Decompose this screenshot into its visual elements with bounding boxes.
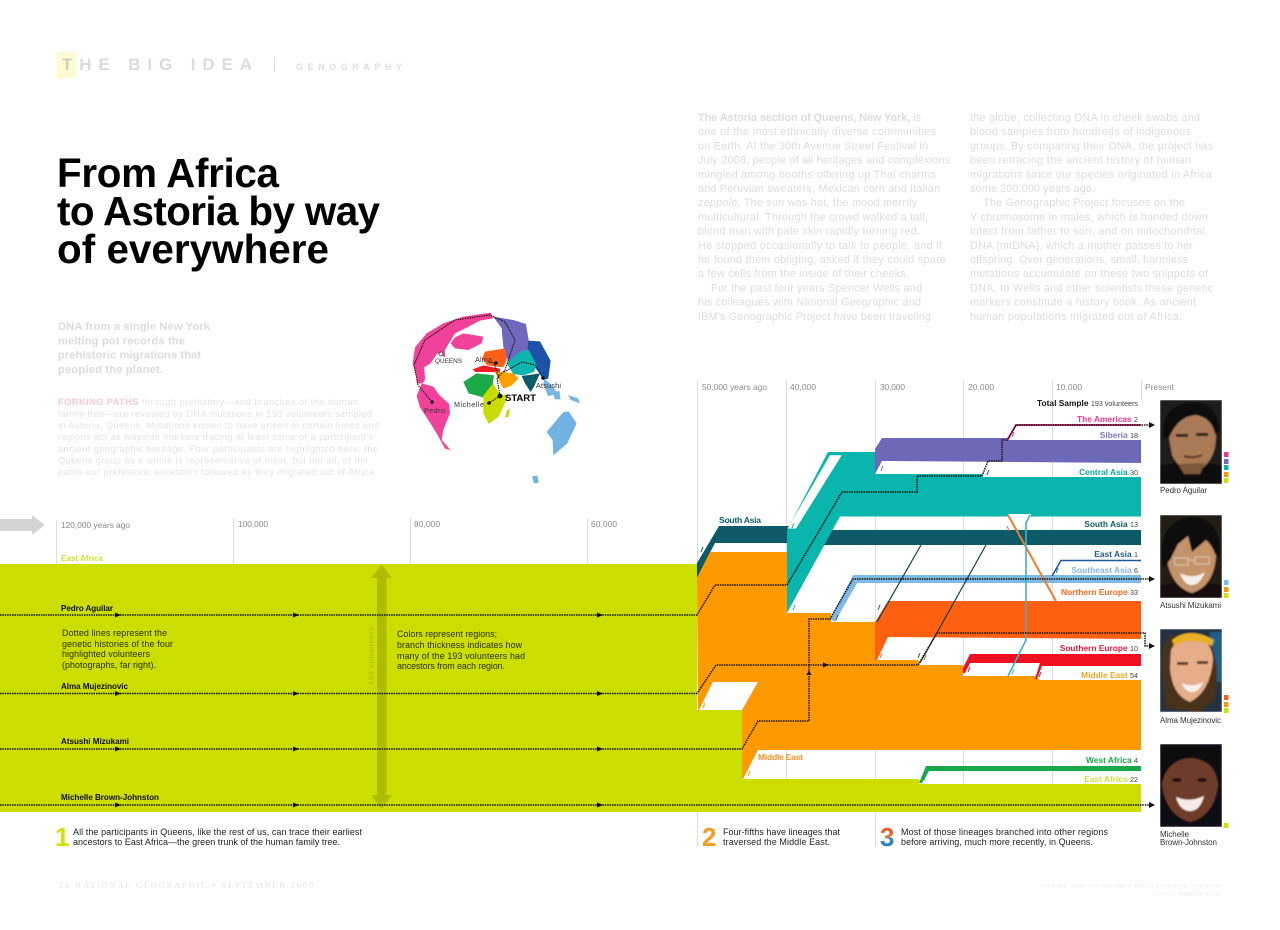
volunteer names on trunk: Alma Mujezinovic bbox=[61, 682, 128, 691]
region swatch: Michelle bbox=[1224, 823, 1228, 828]
timeline labels late: 50,000 years ago bbox=[702, 382, 767, 392]
region labels: Siberia 18 bbox=[1100, 430, 1138, 440]
notch in Central Asia bbox=[1008, 514, 1031, 518]
section header: GENOGRAPHY bbox=[296, 62, 402, 72]
credits bbox=[1040, 884, 1222, 898]
article column 2: DNA (mtDNA), which a mother passes to her bbox=[970, 240, 1193, 252]
dotted route: Michelle bbox=[0, 802, 1155, 808]
region labels: West Africa 4 bbox=[1086, 755, 1138, 765]
forking paths text: in Astoria, Queens. Mutations known to have arisen in certain times and bbox=[58, 420, 379, 430]
timeline labels late: 20,000 bbox=[968, 382, 994, 392]
photo: Alma Mujezinovic bbox=[1160, 629, 1222, 712]
thin connector lines bbox=[877, 545, 986, 663]
label: East Africa trunk: East Africa bbox=[61, 554, 103, 563]
article column 2: Y chromosome in males, which is handed down bbox=[970, 211, 1208, 223]
step 2: 2 bbox=[702, 822, 716, 852]
label: South Asia branch: South Asia bbox=[719, 515, 761, 525]
step 1: All the participants in Queens, like the rest of us, can trace their earliest bbox=[73, 827, 362, 837]
photo: Michelle Brown-Johnston bbox=[1160, 744, 1222, 827]
step 3: before arriving, much more recently, in Queens. bbox=[901, 837, 1093, 847]
article column 2: the globe, collecting DNA in cheek swabs and bbox=[970, 112, 1200, 124]
volunteer names on trunk: Michelle Brown-Johnston bbox=[61, 793, 159, 802]
photo captions: Alma Mujezinovic bbox=[1160, 716, 1221, 725]
article column 1: zeppole. The sun was hot, the mood merrily bbox=[697, 197, 918, 209]
deck text: melting pot records the bbox=[58, 336, 185, 348]
article column 1: The Astoria section of Queens, New York, is bbox=[698, 112, 922, 124]
article column 2: offspring. Over generations, small, harmless bbox=[970, 254, 1189, 266]
region labels: Southeast Asia 6 bbox=[1071, 565, 1138, 575]
gap in Central Asia branch bbox=[788, 455, 842, 528]
region labels: South Asia 13 bbox=[1084, 519, 1138, 529]
article column 2: been retracing the ancient history of human bbox=[970, 155, 1191, 167]
timeline labels early bbox=[61, 519, 617, 530]
arrow: 193 volunteers bbox=[366, 564, 392, 809]
deck text bbox=[58, 321, 211, 376]
timeline labels early: 100,000 bbox=[238, 519, 268, 529]
credits: ARTWORK: JOHN TOMANIO AND M. BRODY DITTEMORE, NGM STAFF bbox=[1040, 884, 1222, 890]
article column 1 bbox=[697, 112, 951, 323]
photo captions bbox=[1160, 486, 1221, 847]
map: labels bbox=[424, 355, 561, 415]
map: labels: Alma bbox=[475, 355, 492, 364]
volunteer names on trunk: Atsushi Mizukami bbox=[61, 737, 129, 746]
note: colors: ancestors from each region. bbox=[397, 661, 505, 671]
photo captions: Atsushi Mizukami bbox=[1160, 601, 1221, 610]
region swatches: Pedro bbox=[1224, 452, 1228, 483]
branch: Southern Europe bbox=[963, 654, 1141, 679]
article column 2: markers constitute a history book. As ancient bbox=[970, 297, 1196, 309]
note: dotted lines: Dotted lines represent the bbox=[62, 628, 167, 638]
article column 1: blond man with pale skin rapidly turning red. bbox=[698, 226, 920, 238]
volunteer names on trunk bbox=[61, 604, 159, 802]
timeline labels late: Present bbox=[1145, 382, 1175, 392]
branch: West Africa bbox=[919, 766, 1141, 783]
article column 1: one of the most ethnically diverse communities bbox=[698, 126, 937, 138]
dotted route: Pedro bbox=[0, 422, 1155, 618]
dotted route: Atsushi bbox=[0, 576, 1155, 752]
region labels: Southern Europe 10 bbox=[1060, 643, 1138, 653]
article column 1: multicultural. Through the crowd walked a tall, bbox=[698, 211, 928, 223]
photo captions: Brown-Johnston bbox=[1160, 838, 1217, 847]
article column 2: The Genographic Project focuses on the bbox=[983, 197, 1185, 209]
timeline labels early: 60,000 bbox=[591, 519, 617, 529]
step 2: Four-fifths have lineages that bbox=[723, 827, 840, 837]
map: labels: Pedro bbox=[424, 406, 445, 415]
volunteer names on trunk: Pedro Aguilar bbox=[61, 604, 114, 613]
branch: Southeast Asia bbox=[830, 575, 1141, 622]
step 3 bbox=[880, 822, 1108, 852]
branch: Siberia bbox=[875, 438, 1141, 474]
article column 2: human populations migrated out of Africa. bbox=[970, 311, 1182, 323]
article column 2: blood samples from hundreds of indigenous bbox=[970, 126, 1192, 138]
deck text: DNA from a single New York bbox=[58, 321, 211, 333]
article column 1: his colleagues with National Geographic and bbox=[698, 297, 921, 309]
forking paths text: Queens group as a whole is representative of most, but not all, of the bbox=[58, 456, 368, 466]
article column 1: He stopped occasionally to talk to people, and if bbox=[698, 240, 943, 252]
photo: Atsushi Mizukami bbox=[1160, 515, 1222, 598]
map: continents by region bbox=[413, 313, 580, 483]
article column 1: on Earth. At the 30th Avenue Street Festival in bbox=[698, 140, 928, 152]
title: of everywhere bbox=[57, 226, 329, 272]
region swatches: Alma bbox=[1224, 695, 1228, 713]
forking paths text: ancient geographic heritage. Four participants are highlighted here; the bbox=[58, 444, 378, 454]
branch: Central Asia bbox=[787, 452, 1141, 613]
timeline grid lines bbox=[56, 380, 1142, 846]
photo captions: Pedro Aguilar bbox=[1160, 486, 1207, 495]
region labels: Total Sample 193 volunteers bbox=[1037, 398, 1138, 408]
note: colors: many of the 193 volunteers had bbox=[397, 651, 525, 661]
page footer: 24 NATIONAL GEOGRAPHIC • SEPTEMBER 2009 bbox=[59, 881, 313, 890]
step 1: ancestors to East Africa—the green trunk of the human family tree. bbox=[73, 837, 340, 847]
step 3: 3 bbox=[880, 822, 894, 852]
note: dotted lines: (photographs, far right). bbox=[62, 660, 156, 670]
step 2 bbox=[702, 822, 840, 852]
crossing: Northern Europe line bbox=[1008, 515, 1056, 601]
region labels: Middle East 54 bbox=[1081, 670, 1138, 680]
forking paths text: paths our prehistoric ancestors followed as they migrated out of Africa bbox=[58, 467, 375, 477]
title: From Africa bbox=[57, 150, 280, 196]
branch: East Asia bbox=[1052, 560, 1141, 576]
forking paths text bbox=[58, 397, 379, 477]
article column 2: mutations accumulate on these two snippets of bbox=[970, 268, 1209, 280]
step 3: Most of those lineages branched into other regions bbox=[901, 827, 1108, 837]
branch: East Africa trunk bbox=[0, 564, 1141, 812]
note: dotted lines bbox=[62, 628, 173, 670]
branch: Middle East bbox=[697, 552, 1141, 779]
photo: Pedro Aguilar bbox=[1160, 400, 1222, 484]
family tree branching chart bbox=[0, 425, 1141, 812]
article column 2 bbox=[970, 112, 1214, 323]
timeline labels late: 10,000 bbox=[1056, 382, 1082, 392]
article column 2: DNA; to Wells and other scientists these genetic bbox=[970, 282, 1214, 294]
note: colors: branch thickness indicates how bbox=[397, 640, 523, 650]
timeline labels early: 80,000 bbox=[414, 519, 440, 529]
section header bbox=[57, 52, 402, 78]
map: markers bbox=[430, 352, 545, 405]
article column 1: July 2008, people of all heritages and complexions bbox=[698, 155, 951, 167]
step 1 bbox=[55, 822, 362, 852]
deck text: prehistoric migrations that bbox=[58, 350, 201, 362]
forking paths text: family tree—are revealed by DNA mutations in 193 volunteers sampled bbox=[58, 409, 372, 419]
map: labels: Atsushi bbox=[536, 381, 561, 390]
step 1: 1 bbox=[55, 822, 69, 852]
region swatches: Atsushi bbox=[1224, 580, 1228, 598]
timeline labels late: 30,000 bbox=[880, 382, 905, 392]
note: colors: Colors represent regions; bbox=[397, 629, 497, 639]
article column 1: a few cells from the inside of their cheeks. bbox=[698, 268, 909, 280]
region labels: The Americas 2 bbox=[1077, 414, 1138, 424]
article column 2: migrations since our species originated in Africa bbox=[970, 169, 1212, 181]
mutation ticks bbox=[701, 432, 1058, 780]
map: labels: Michelle bbox=[454, 400, 484, 409]
photo captions: Michelle bbox=[1160, 830, 1190, 839]
map: routes bbox=[414, 315, 515, 402]
article column 1: mingled among booths offering up Thai charms bbox=[698, 169, 937, 181]
branch: Northern Europe bbox=[875, 601, 1141, 660]
article column 1: IBM's Genographic Project have been traveling bbox=[698, 311, 931, 323]
region labels: East Africa 22 bbox=[1084, 774, 1138, 784]
timeline labels late bbox=[702, 382, 1175, 392]
dotted route: Alma bbox=[0, 633, 1155, 696]
map: labels: START bbox=[505, 393, 536, 404]
article column 1: and Peruvian sweaters, Mexican corn and Italian bbox=[698, 183, 940, 195]
article column 2: some 200,000 years ago. bbox=[970, 183, 1095, 195]
arrow: timeline continues from previous page bbox=[0, 515, 45, 535]
title: to Astoria by way bbox=[57, 188, 381, 234]
note: dotted lines: highlighted volunteers bbox=[62, 649, 151, 659]
deck text: peopled the planet. bbox=[58, 364, 163, 376]
arrow: 193 volunteers: 193 volunteers bbox=[366, 627, 376, 685]
note: dotted lines: genetic histories of the four bbox=[62, 639, 173, 649]
article column 1: he found them obliging, asked if they could spare bbox=[698, 254, 946, 266]
forking paths text: FORKING PATHS through prehistory—and branches of the human bbox=[58, 397, 358, 407]
region labels bbox=[1037, 398, 1138, 784]
article column 2: intact from father to son, and on mitochondrial bbox=[970, 226, 1205, 238]
region labels: East Asia 1 bbox=[1094, 549, 1138, 559]
timeline labels early: 120,000 years ago bbox=[61, 520, 130, 530]
title bbox=[57, 150, 381, 272]
crossing: Southern-route line bbox=[1008, 515, 1030, 676]
gap in Middle East branch bbox=[699, 682, 758, 710]
forking paths text: regions act as wayside markers tracing at least some of a participant's bbox=[58, 432, 373, 442]
branch: South Asia bbox=[697, 526, 1141, 578]
region labels: Northern Europe 33 bbox=[1061, 587, 1138, 597]
credits: SOURCE: SPENCER WELLS bbox=[1153, 892, 1222, 898]
region labels: Central Asia 30 bbox=[1079, 467, 1138, 477]
world map with migration routes bbox=[413, 313, 580, 483]
article column 1: For the past four years Spencer Wells and bbox=[711, 282, 922, 294]
map: labels: QUEENS bbox=[435, 358, 462, 365]
label: Middle East branch: Middle East bbox=[758, 752, 803, 762]
note: colors bbox=[397, 629, 525, 671]
step 2: traversed the Middle East. bbox=[723, 837, 830, 847]
section header: T HE BIG IDEA bbox=[62, 55, 252, 74]
branch: The Americas bbox=[1007, 425, 1141, 441]
article column 2: groups. By comparing their DNA, the project has bbox=[970, 140, 1214, 152]
timeline labels late: 40,000 bbox=[790, 382, 816, 392]
